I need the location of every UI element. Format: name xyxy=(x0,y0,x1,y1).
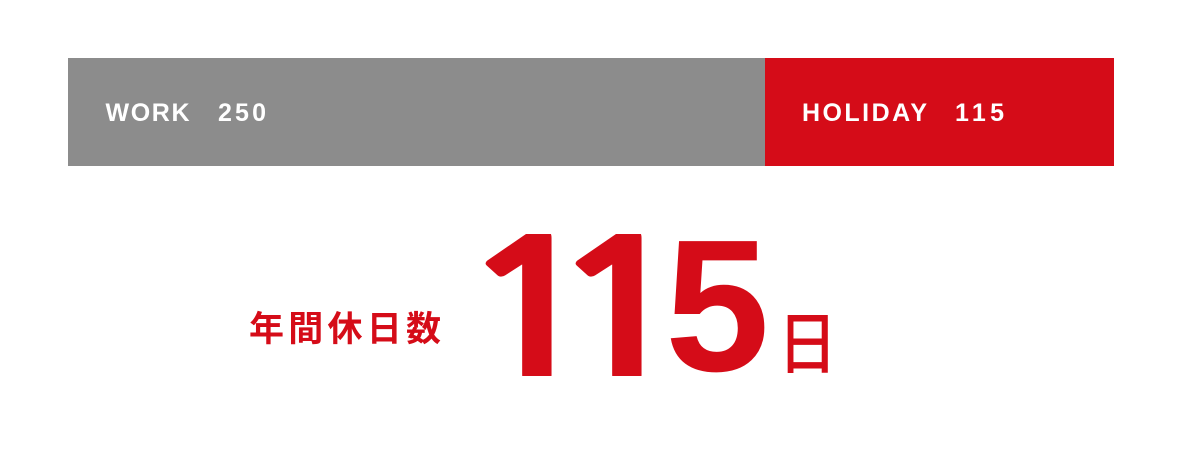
unit: days: 日 xyxy=(778,308,837,383)
label: holiday 115: 115 xyxy=(955,99,1004,127)
label: work 250 xyxy=(106,99,266,127)
label: holiday 115: HOLIDAY xyxy=(802,99,927,127)
big number: 115: 1 xyxy=(544,218,698,406)
label: work 250: WORK xyxy=(106,99,190,127)
heading: annual holidays label: 年間休日数 xyxy=(249,310,441,349)
big number: 115 xyxy=(486,234,764,376)
panel: work days bar xyxy=(68,58,765,166)
big number: 115: 5 xyxy=(665,200,770,410)
label: work 250: 250 xyxy=(218,99,266,127)
big number: 115: 1 xyxy=(454,218,608,406)
panel: holiday bar xyxy=(765,58,1114,166)
label: holiday 115 xyxy=(802,99,1004,127)
infographic xyxy=(68,58,1114,376)
